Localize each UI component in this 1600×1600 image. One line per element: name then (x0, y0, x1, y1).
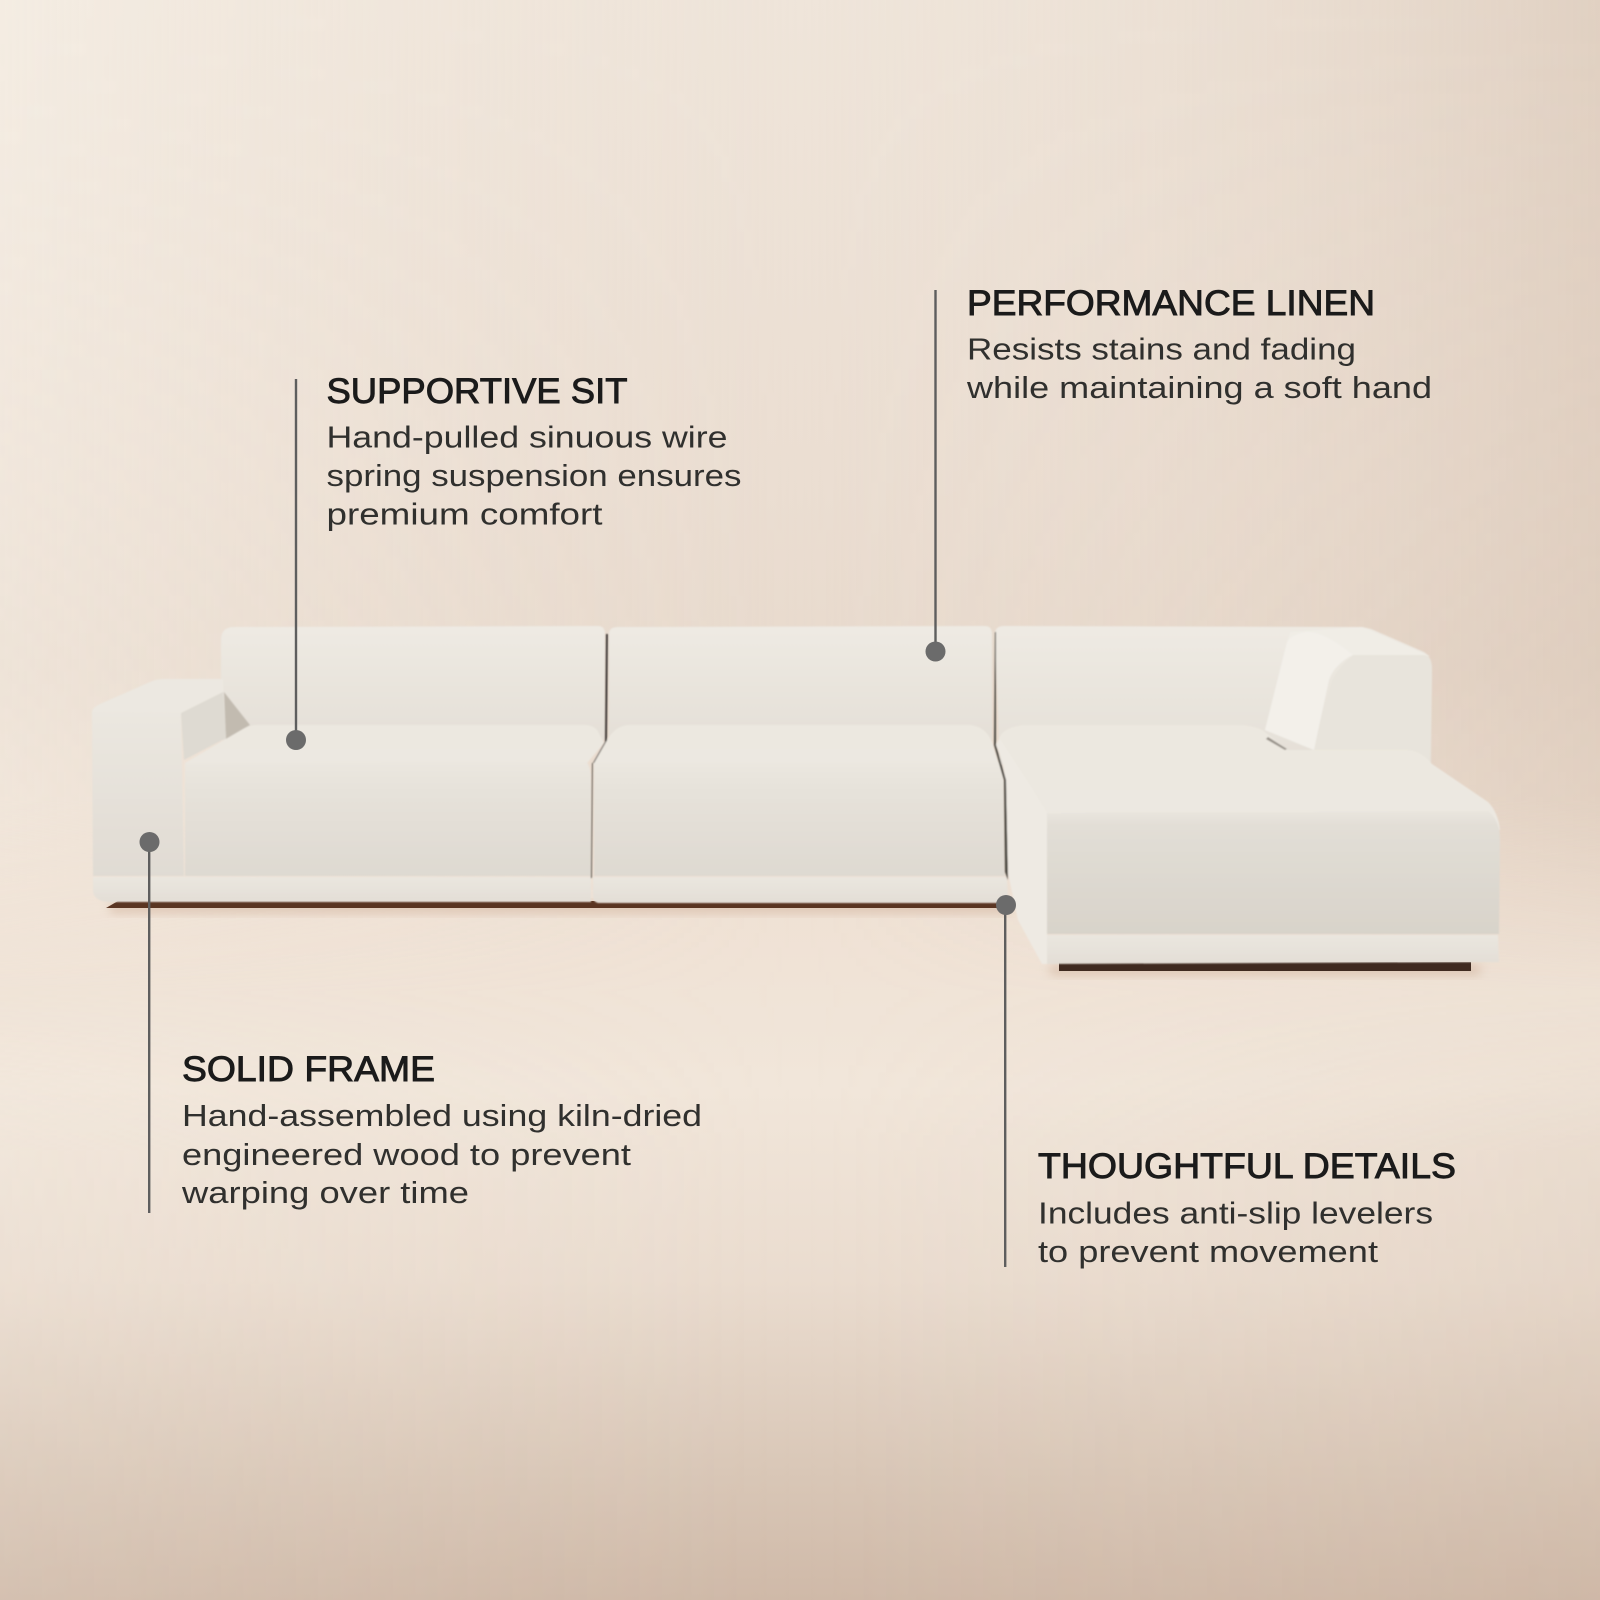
left arm inner face (181, 692, 226, 760)
callout: supportive sit (286, 372, 742, 750)
body text: Includes anti-slip levelers (1038, 1196, 1433, 1230)
arm tuck shadow (1266, 737, 1287, 750)
body text: to prevent movement (1038, 1234, 1378, 1269)
body text (1038, 1196, 1433, 1269)
left arm top (92, 679, 223, 713)
leader line and dot (286, 379, 306, 750)
base 2 (593, 877, 1008, 903)
chaise base (1047, 935, 1499, 964)
chaise side (996, 737, 1047, 964)
body text (966, 332, 1432, 405)
body text: Hand-pulled sinuous wire (326, 420, 728, 454)
heading: SOLID FRAME (182, 1050, 435, 1089)
callout: solid frame (140, 832, 702, 1213)
seat 1 top (185, 725, 604, 763)
body text: spring suspension ensures (326, 458, 742, 493)
center sofa module (591, 626, 1008, 903)
back cushion right (995, 626, 1432, 764)
body text: while maintaining a soft hand (966, 370, 1432, 405)
heading: PERFORMANCE LINEN (967, 284, 1375, 323)
heading: SUPPORTIVE SIT (326, 372, 628, 411)
back cushion center (609, 626, 992, 740)
body text: warping over time (181, 1175, 469, 1210)
body text: Resists stains and fading (967, 332, 1356, 366)
callout: performance linen (926, 284, 1432, 662)
right chaise module (994, 626, 1500, 964)
seat 2 front (594, 762, 1005, 876)
left arm front (92, 712, 184, 876)
sofa illustration (92, 626, 1500, 975)
seat 2 top (594, 725, 999, 765)
base 1 (93, 877, 591, 902)
gap at chaise (994, 632, 1008, 880)
floor shadow (106, 901, 1480, 975)
left arm shadow on back cushion (224, 692, 250, 739)
left sofa module (92, 626, 605, 902)
right arm front (1314, 655, 1432, 764)
seat 1 front (185, 761, 591, 876)
body text (326, 420, 742, 532)
leader line and dot (926, 290, 946, 662)
body text: engineered wood to prevent (182, 1137, 631, 1172)
right arm top (1265, 627, 1430, 750)
callout: thoughtful details (996, 895, 1456, 1269)
leader line and dot (996, 895, 1016, 1267)
leader line and dot (140, 832, 160, 1213)
gap between back cushions (593, 634, 608, 763)
gap between modules (591, 763, 593, 878)
body text: Hand-assembled using kiln-dried (182, 1098, 702, 1133)
back cushion left (221, 626, 605, 740)
chaise top (999, 725, 1500, 830)
chaise front (1047, 811, 1500, 934)
body text (181, 1098, 702, 1210)
right arm inner face (1265, 632, 1353, 750)
body text: premium comfort (326, 496, 603, 532)
heading: THOUGHTFUL DETAILS (1038, 1147, 1456, 1186)
